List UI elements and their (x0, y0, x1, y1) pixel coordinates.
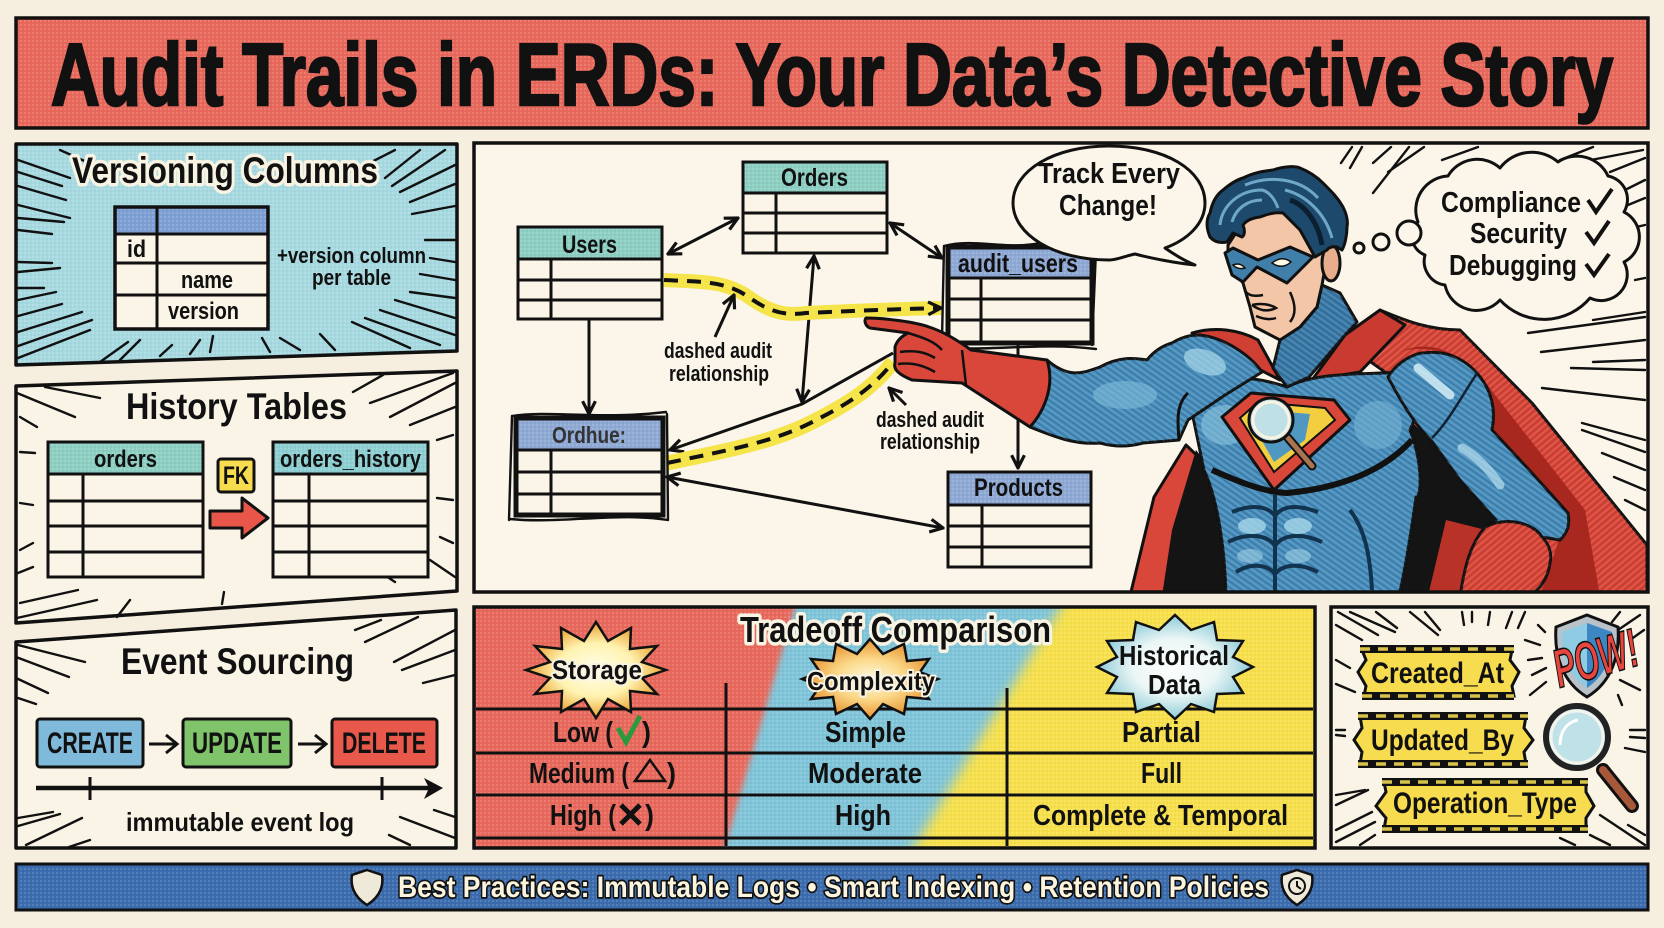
table: Ordhue: Ordhue: (552, 422, 626, 448)
field badge: updated_by (1354, 716, 1533, 764)
glove and pointing hand (865, 318, 1050, 427)
table: audit_users: audit_users (958, 248, 1078, 278)
orders_history table: orders_history (280, 446, 422, 473)
table grid (476, 683, 1313, 846)
eyes (1233, 259, 1291, 269)
pointing arm (1030, 335, 1262, 446)
panel: ERD diagram and hero (474, 143, 1648, 596)
panel: history tables (16, 371, 457, 623)
field badge: created_at: Created_At (1371, 657, 1504, 690)
versioning table (115, 207, 268, 329)
DELETE box: DELETE (342, 727, 426, 760)
cape (1130, 310, 1647, 596)
thought bubble: Debugging (1449, 250, 1577, 282)
ear (1322, 245, 1340, 281)
annotation: dashed audit relationship bottom (876, 388, 985, 454)
burst: historical data (1097, 615, 1253, 719)
FK label (218, 459, 254, 492)
storage column values: Medium ( (529, 758, 629, 790)
UPDATE box: UPDATE (192, 727, 282, 760)
face (1228, 205, 1330, 340)
thought bubble: Compliance (1441, 187, 1581, 219)
speech bubble (1013, 146, 1205, 265)
table: Products: Products (974, 474, 1063, 502)
table: Users: Users (562, 231, 617, 259)
icon: shield clock right (1282, 870, 1312, 905)
mask (1225, 247, 1313, 283)
right glove (1460, 522, 1551, 596)
diagram: relationship arrows (589, 218, 1018, 528)
footer banner (16, 864, 1648, 910)
icon: magnifying glass (1546, 706, 1632, 806)
hair (1207, 167, 1347, 257)
complexity column values (808, 717, 922, 832)
orders table (48, 442, 203, 577)
burst: historical data: Historical (1119, 640, 1229, 671)
timeline arrow (36, 777, 443, 800)
version note: +version column (277, 243, 426, 268)
panel: audit fields (1331, 607, 1648, 848)
storage column values: ) (667, 758, 676, 790)
dashed audit relationship 2 (667, 362, 893, 463)
icon: pow burst (1525, 618, 1645, 705)
panel: event sourcing (16, 610, 456, 848)
arrow (298, 735, 326, 753)
burst: storage: Storage (552, 655, 642, 685)
icon: shield left (352, 870, 382, 905)
storage column values: ) (645, 800, 654, 832)
orders table: orders (94, 446, 157, 473)
CREATE box: CREATE (47, 727, 133, 760)
historical data column values: Full (1141, 758, 1182, 790)
UPDATE box (183, 719, 291, 767)
table: Users (518, 227, 662, 319)
table: Orders: Orders (781, 164, 848, 192)
speech bubble: Change! (1059, 190, 1157, 222)
heading: Versioning Columns (72, 150, 378, 191)
timeline caption: immutable event log (126, 807, 354, 837)
thought bubble: Security (1470, 218, 1567, 250)
emblem (1222, 393, 1350, 490)
panel: tradeoff comparison (472, 605, 1317, 850)
versioning table: id (127, 236, 146, 263)
versioning table: name (181, 267, 233, 294)
best practices text: Best Practices: Immutable Logs • Smart Indexing • Retention Policies (398, 871, 1269, 904)
versioning table: version (168, 298, 239, 325)
field badge: operation_type: Operation_Type (1393, 787, 1577, 820)
storage column values (529, 716, 676, 832)
FK label: FK (223, 462, 249, 490)
complexity column values: High (835, 800, 891, 832)
complexity column values: Simple (825, 717, 906, 749)
table: Orders (743, 162, 887, 253)
speech bubble: Track Every (1038, 158, 1180, 190)
table: Ordhue (509, 412, 668, 520)
burst: complexity: Complexity (807, 666, 935, 696)
arrow (149, 735, 177, 753)
CREATE box (37, 719, 143, 767)
annotation: dashed audit relationship top: relationship (669, 361, 769, 386)
icon: shield (1556, 615, 1618, 697)
panel border (474, 143, 1648, 592)
field badge: created_at (1358, 649, 1519, 696)
annotation: dashed audit relationship top: dashed audit (664, 338, 773, 363)
dashed audit relationship 1 (664, 280, 941, 314)
title banner (16, 18, 1648, 128)
version note: per table (312, 265, 391, 290)
heading: Tradeoff Comparison (740, 609, 1051, 650)
historical data column values (1033, 717, 1288, 832)
burst: storage (526, 622, 666, 718)
burst: historical data: Data (1148, 669, 1201, 700)
burst: complexity (802, 639, 938, 719)
annotation: dashed audit relationship bottom: relationship (880, 429, 980, 454)
orders_history table (273, 442, 428, 577)
historical data column values: Complete & Temporal (1033, 800, 1288, 832)
speed lines (1341, 147, 1645, 510)
heading: Event Sourcing (121, 641, 354, 682)
heading: History Tables (126, 386, 347, 427)
version note (277, 243, 426, 290)
annotation: dashed audit relationship bottom: dashed audit (876, 407, 985, 432)
field badge: operation_type (1376, 782, 1594, 829)
right arm (1388, 352, 1569, 540)
torso (1188, 372, 1420, 596)
table: audit_users (942, 240, 1096, 349)
panel: versioning columns (16, 144, 457, 365)
neck (1273, 285, 1357, 387)
storage column values: Low ( (553, 717, 613, 749)
DELETE box (332, 719, 437, 767)
annotation: dashed audit relationship top (664, 295, 773, 386)
thought bubble (1354, 152, 1639, 319)
arrow: foreign key (210, 498, 268, 538)
historical data column values: Partial (1122, 717, 1201, 749)
hero illustration (865, 167, 1647, 596)
complexity column values: Moderate (808, 758, 922, 790)
field badge: updated_by: Updated_By (1371, 724, 1514, 757)
table: Products (948, 472, 1091, 567)
storage column values: High ( (550, 800, 616, 832)
storage column values: ) (642, 717, 651, 749)
